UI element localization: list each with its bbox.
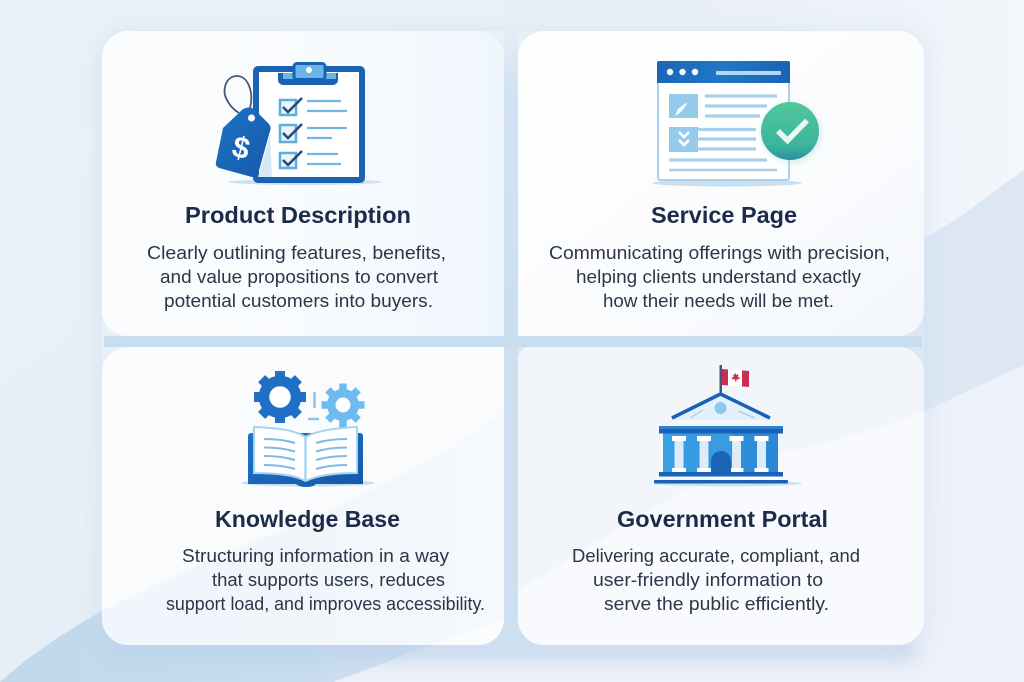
- text block: service page: [549, 243, 890, 311]
- heading: service page: Service Page: [651, 202, 797, 228]
- icon: book with gears: [241, 371, 375, 487]
- text block: knowledge base: Structuring information in a way: [182, 546, 449, 566]
- text block: government portal: Delivering accurate, compliant, and: [572, 546, 860, 566]
- heading: product description: Product Description: [185, 202, 411, 228]
- text block: government portal: user-friendly information to: [593, 570, 823, 590]
- text block: product description: [147, 243, 446, 311]
- icon: small gear: [322, 384, 364, 428]
- icon: clipboard with price tag: [216, 64, 382, 185]
- text block: product description: Clearly outlining features, benefits,: [147, 243, 446, 263]
- heading: knowledge base: Knowledge Base: [215, 506, 400, 532]
- icon: large gear: [254, 371, 306, 423]
- text block: knowledge base: [166, 546, 485, 614]
- text block: product description: and value propositions to convert: [160, 267, 438, 287]
- icon: flag: [722, 369, 749, 387]
- icon: web page with check badge: [652, 61, 821, 186]
- panel: product description: [102, 31, 504, 336]
- text block: service page: Communicating offerings with precision,: [549, 243, 890, 263]
- text block: service page: how their needs will be met.: [603, 291, 834, 311]
- panel: knowledge base: [102, 347, 504, 645]
- text block: government portal: [572, 546, 860, 614]
- heading: government portal: Government Portal: [617, 506, 828, 532]
- text block: knowledge base: support load, and improves accessibility.: [166, 594, 485, 614]
- panel: service page: [518, 31, 924, 336]
- text block: service page: helping clients understand exactly: [576, 267, 861, 287]
- text block: knowledge base: that supports users, reduces: [212, 570, 445, 590]
- text block: product description: potential customers into buyers.: [164, 291, 433, 311]
- icon: government building with flag: [654, 365, 802, 486]
- text block: government portal: serve the public efficiently.: [604, 594, 829, 614]
- panel: government portal: [518, 347, 924, 645]
- icon: clipboard with price tag: $: [229, 130, 253, 167]
